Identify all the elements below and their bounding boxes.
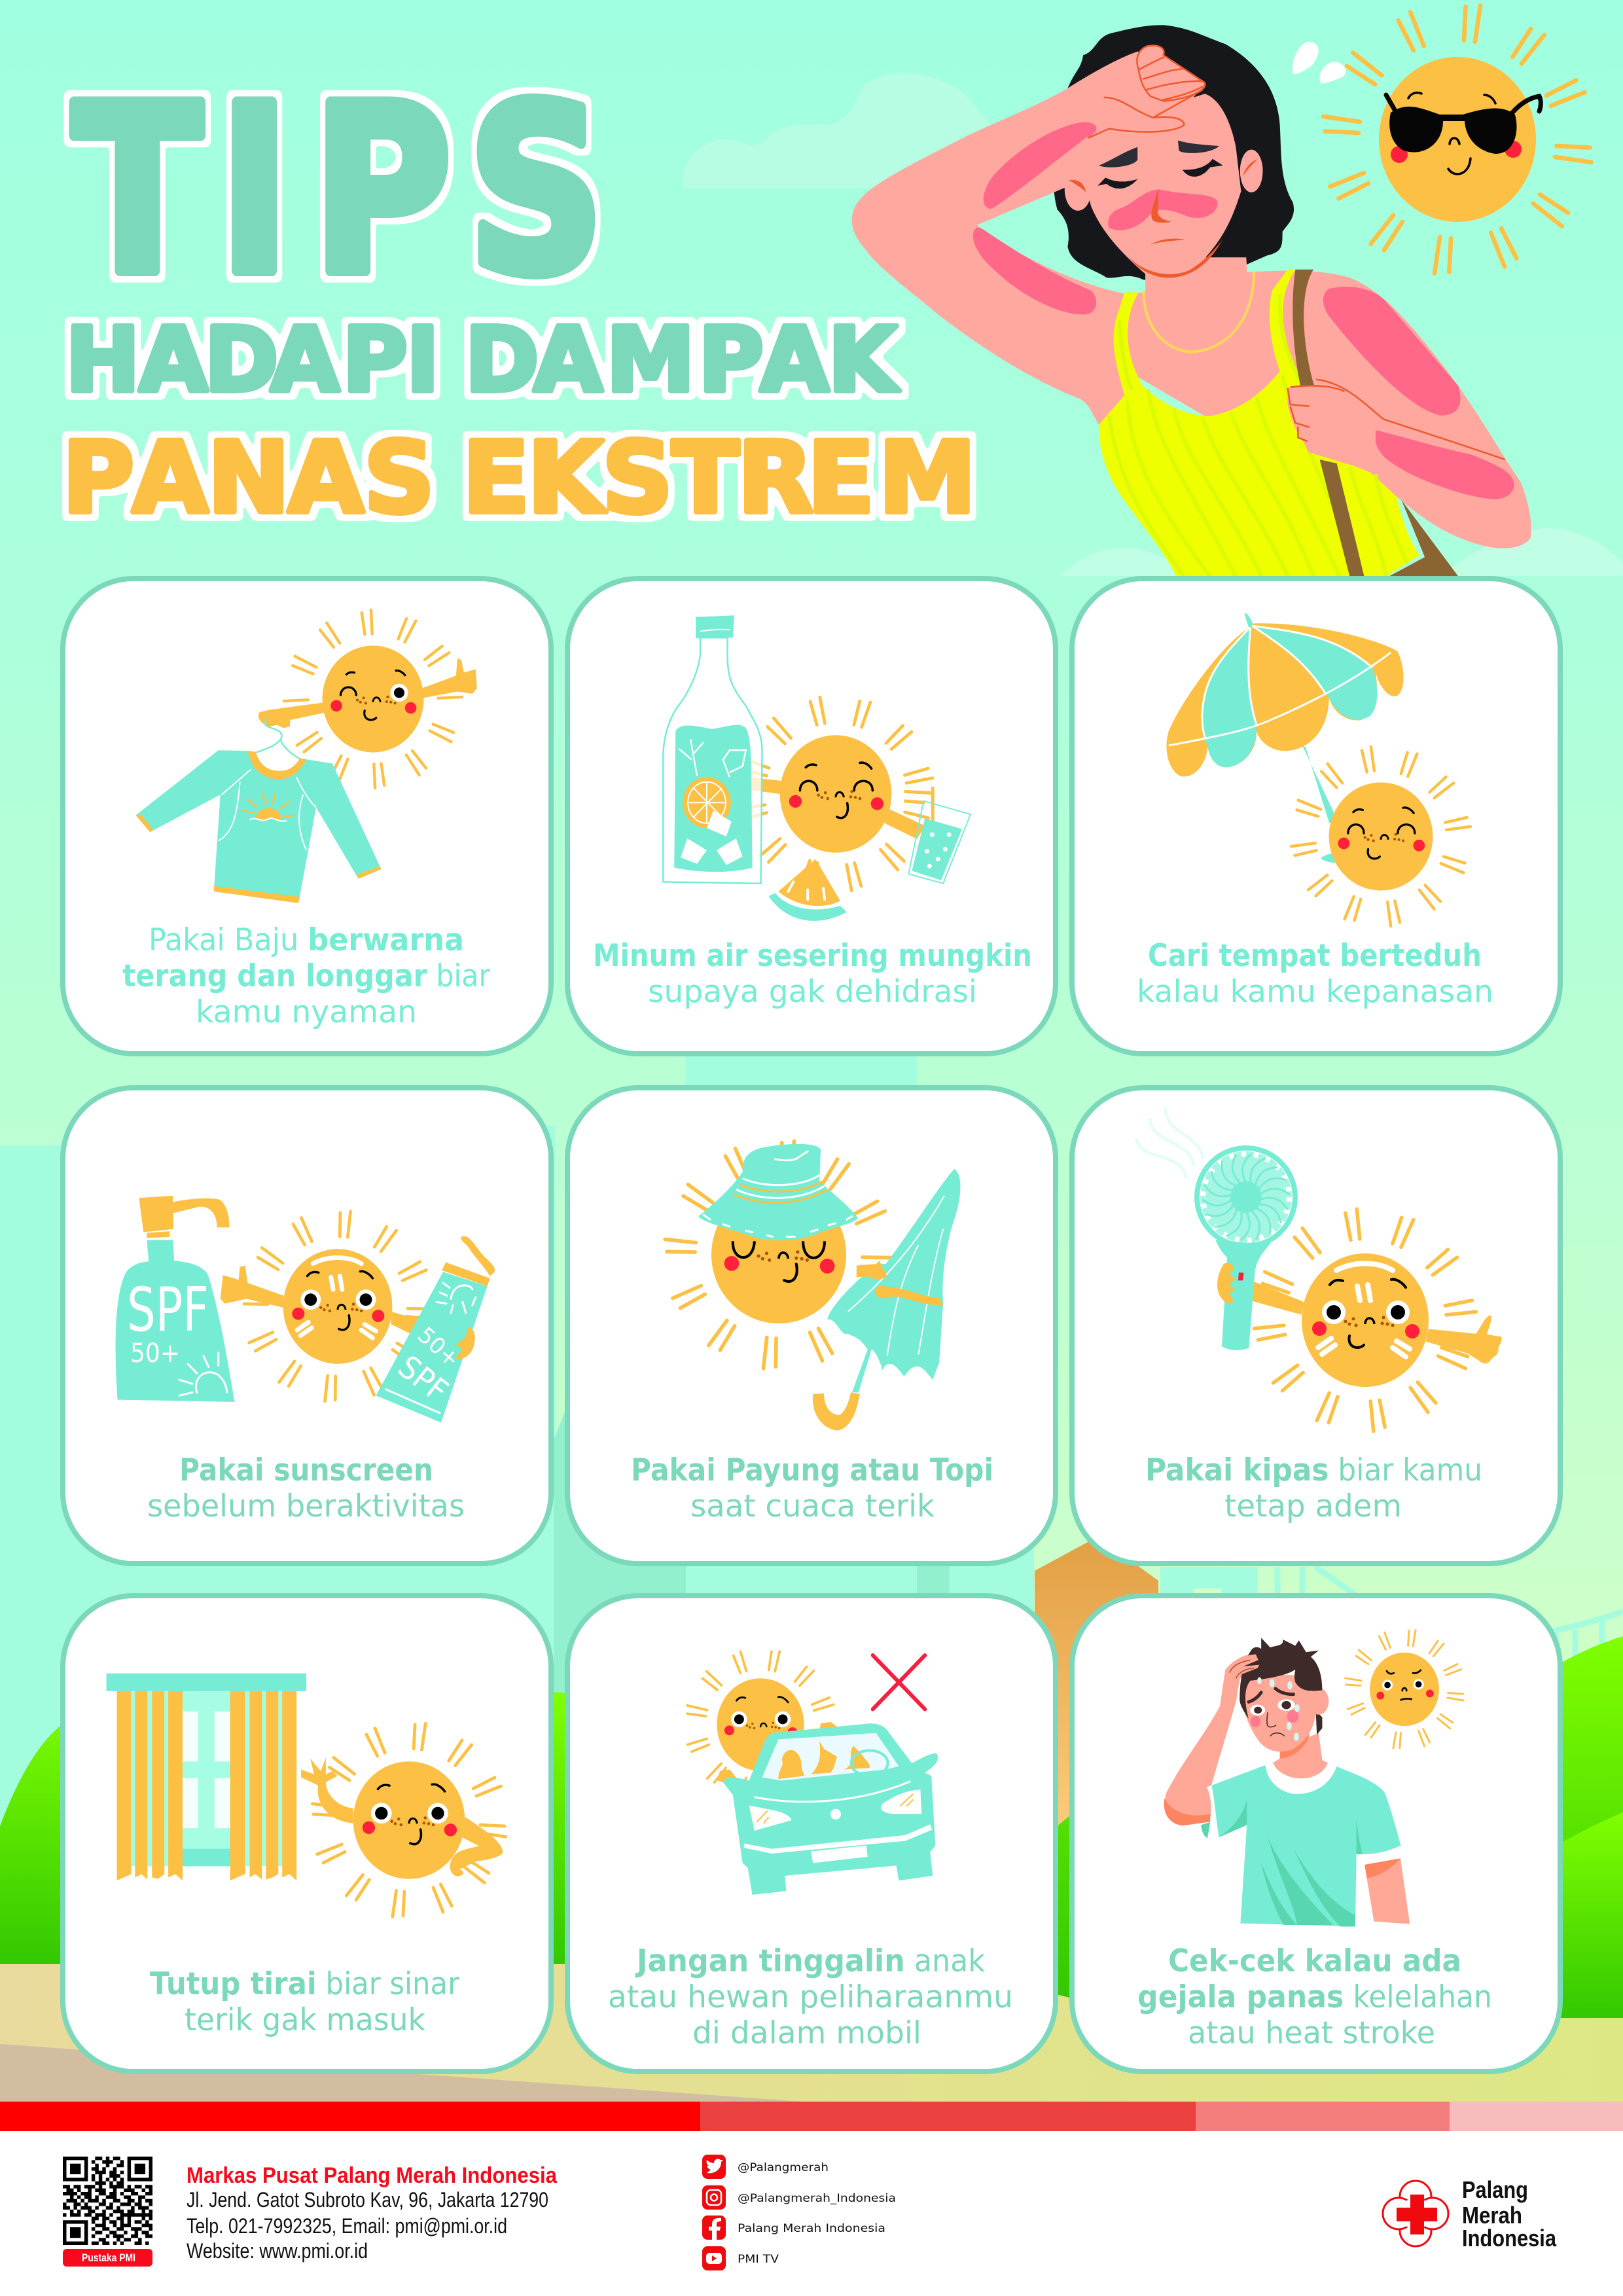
car windshield	[762, 1733, 899, 1781]
fan handle and arms	[1215, 1240, 1502, 1363]
background: right hills	[1492, 1636, 1623, 2018]
tube label: SPF: SPF	[391, 1348, 455, 1410]
man: nose and mouth	[1267, 1712, 1285, 1736]
sun body	[1379, 57, 1536, 222]
QR code	[63, 2159, 152, 2267]
footer: social links	[702, 2155, 896, 2270]
caption: card 6: tetap adem	[1224, 1488, 1402, 1524]
fan head	[1197, 1148, 1295, 1246]
car body	[723, 1723, 938, 1895]
caption: card 2: Minum air sesering mungkin	[593, 938, 1032, 974]
logo text: Palang	[1462, 2176, 1528, 2203]
background: road wedge	[0, 2044, 802, 2102]
logo cross	[1397, 2195, 1437, 2234]
background: clouds	[683, 73, 1054, 188]
logo white center	[1400, 2198, 1431, 2229]
fan illustration	[1136, 1107, 1502, 1363]
panel: card 4 sunscreen	[63, 1088, 551, 1564]
caption: card 5: saat cuaca terik	[690, 1488, 935, 1524]
caption: card 1	[122, 922, 491, 1030]
man: elbow shade	[1164, 1798, 1210, 1825]
headlight glints	[757, 1794, 913, 1823]
caption: card 5: Pakai Payung atau Topi	[631, 1452, 993, 1488]
panel: card 1 clothes	[63, 579, 551, 1054]
shirt trim	[135, 751, 381, 903]
caption: card 7: terik gak masuk	[185, 2002, 426, 2038]
background: middle-right hill	[1021, 1813, 1178, 2022]
social text: PMI TV	[738, 2253, 779, 2266]
background: buildings	[0, 1021, 1368, 1872]
icon: youtube	[702, 2246, 726, 2270]
woman: top stripes	[1109, 294, 1406, 577]
sun arms	[259, 658, 477, 728]
woman: hand contour lines	[1288, 380, 1505, 459]
ice cubes	[681, 810, 743, 865]
caption: card 7	[150, 1966, 460, 2038]
shirt	[135, 750, 381, 903]
caption: card 5	[631, 1452, 993, 1524]
social text: Palang Merah Indonesia	[738, 2222, 885, 2235]
curtains illustration	[107, 1674, 503, 1880]
shirt lines	[219, 769, 316, 850]
hat bands	[736, 1175, 824, 1198]
woman: body and right arm	[1122, 257, 1531, 548]
man: sweat drops	[1257, 1677, 1300, 1741]
tube cap	[442, 1236, 495, 1286]
title: PANAS EKSTREM: PANAS EKSTREM	[62, 422, 976, 535]
woman: raised arm	[852, 52, 1205, 425]
man: arm shade	[1364, 1858, 1400, 1878]
panel: card 2 water	[567, 579, 1056, 1054]
man: raised arm	[1165, 1655, 1259, 1825]
bottle label: 50+: 50+	[130, 1338, 180, 1369]
background: left hill	[0, 1687, 982, 1970]
tube lines	[385, 1283, 476, 1413]
man illustration	[1164, 1638, 1410, 1926]
bottle label: SPF: SPF	[127, 1275, 209, 1346]
water illustration	[663, 615, 971, 921]
footer: address: Website: www.pmi.or.id	[187, 2239, 368, 2263]
man: hand fingers	[1226, 1655, 1259, 1681]
window panes	[183, 1712, 230, 1828]
car emblem	[830, 1809, 841, 1820]
footer: address: Markas Pusat Palang Merah Indonesia	[187, 2163, 558, 2188]
sun arms	[749, 777, 925, 839]
man: face	[1242, 1675, 1316, 1751]
icon: twitter	[702, 2155, 726, 2179]
woman: yellow top	[1099, 270, 1419, 577]
panel: card 8 car	[567, 1596, 1056, 2072]
bottle water	[674, 725, 753, 872]
caption: card 1: terang dan longgar biar	[122, 958, 491, 994]
woman: face	[1085, 94, 1241, 276]
window	[130, 1691, 296, 1866]
sun: card 8	[671, 1635, 850, 1814]
caption: card 1: Pakai Baju berwarna	[149, 922, 464, 958]
caption: card 4	[147, 1452, 465, 1524]
sun arms	[221, 1266, 423, 1337]
woman: eyebrows and closed eyes	[1099, 141, 1219, 168]
tube label: 50+: 50+	[412, 1322, 465, 1373]
curtains	[117, 1691, 296, 1880]
caption: card 3	[1137, 938, 1493, 1010]
umbrella and hat illustration	[698, 1144, 960, 1431]
woman: fingers on forehead	[1137, 46, 1205, 101]
caption: card 8: atau hewan peliharaanmu	[608, 1979, 1013, 2015]
caption: card 6	[1145, 1452, 1482, 1524]
woman: finger lines	[1088, 57, 1204, 138]
panel: card 6 fan	[1072, 1088, 1560, 1564]
caption: card 9: gejala panas kelelahan	[1137, 1979, 1492, 2015]
background: railing	[1505, 1611, 1623, 1676]
sun: card 3	[1277, 733, 1484, 940]
man: eyebrows	[1249, 1689, 1294, 1702]
caption: card 4: Pakai sunscreen	[179, 1452, 433, 1488]
logo flower	[1383, 2181, 1448, 2246]
man: right arm	[1364, 1858, 1410, 1924]
caption: card 9: atau heat stroke	[1188, 2015, 1435, 2051]
shirt illustration	[135, 658, 477, 903]
woman: eyelids	[1097, 159, 1223, 188]
QR label: Pustaka PMI	[82, 2251, 135, 2264]
sun hands	[718, 1722, 837, 1784]
woman: hand on strap	[1288, 385, 1505, 473]
man: hand lines	[1230, 1660, 1254, 1678]
panel: card 3 shade	[1072, 579, 1560, 1054]
woman: bag strap	[1293, 270, 1458, 577]
woman: necklace	[1144, 272, 1254, 352]
bottle pump	[139, 1196, 230, 1238]
leaves	[679, 739, 746, 777]
sun: card 9	[1336, 1621, 1472, 1757]
caption: card 9	[1137, 1943, 1492, 2051]
woman: hair	[1050, 25, 1294, 287]
woman: sweat drops	[1293, 41, 1346, 84]
bottle cap	[696, 615, 734, 638]
car bumper	[744, 1824, 932, 1863]
man: shirt	[1211, 1763, 1401, 1926]
logo text: Merah	[1462, 2202, 1522, 2229]
hat stitches	[704, 1151, 852, 1236]
hat orange bands	[733, 1181, 827, 1202]
panel: card 5 umbrella and hat	[567, 1088, 1056, 1564]
glass and straw	[931, 787, 935, 823]
sun: card 5	[654, 1130, 903, 1379]
umbrella handle	[813, 1392, 860, 1431]
caption: card 8: Jangan tinggalin anak	[635, 1943, 986, 1979]
icon: facebook	[702, 2215, 726, 2240]
title: HADAPI DAMPAK: HADAPI DAMPAK	[65, 309, 900, 412]
caption: card 2	[593, 938, 1032, 1010]
passengers	[778, 1741, 870, 1779]
panel: card 9 symptoms	[1072, 1596, 1560, 2072]
steering wheel	[851, 1750, 888, 1776]
woman: ears	[1065, 150, 1263, 211]
sun arm waving	[301, 1758, 503, 1876]
man: shirt folds	[1201, 1800, 1363, 1926]
caption: card 3: Cari tempat berteduh	[1148, 938, 1482, 974]
closed umbrella	[827, 1169, 960, 1392]
caption: card 1: kamu nyaman	[196, 994, 417, 1030]
curtain rod	[107, 1674, 306, 1691]
title	[62, 56, 976, 535]
fan steam	[1136, 1107, 1203, 1178]
footer: address	[187, 2163, 558, 2263]
sun smile	[1408, 93, 1495, 174]
hood line	[755, 1781, 910, 1802]
man: neck shade	[1280, 1733, 1310, 1759]
caption: card 4: sebelum beraktivitas	[147, 1488, 465, 1524]
sunscreen tube	[376, 1272, 488, 1422]
man: eyes	[1250, 1699, 1295, 1715]
sunglasses	[1386, 95, 1541, 154]
background: cloud right	[1060, 528, 1623, 576]
logo: Palang Merah Indonesia	[1383, 2176, 1557, 2251]
logo text	[1462, 2176, 1557, 2251]
red cross mark	[873, 1655, 925, 1709]
caption: card 3: kalau kamu kepanasan	[1137, 974, 1493, 1010]
social text: @Palangmerah_Indonesia	[738, 2192, 896, 2205]
window sill	[183, 1849, 232, 1866]
sun hand	[857, 1261, 887, 1280]
background: house	[1035, 1537, 1160, 1833]
car headlights	[749, 1789, 921, 1831]
shirt hanger	[255, 719, 300, 759]
melon slice	[778, 859, 840, 906]
footer background	[0, 2131, 1623, 2296]
orange slice	[683, 777, 731, 828]
illustration: woman with sunburn	[852, 25, 1531, 577]
tube hand	[455, 1327, 475, 1359]
sun: card 1	[278, 604, 468, 794]
sun cheeks	[1391, 141, 1522, 163]
illustration: sun with sunglasses	[1306, 0, 1609, 291]
QR label	[63, 2249, 152, 2267]
icon: instagram	[702, 2185, 726, 2210]
title: TIPS: TIPS	[73, 56, 604, 325]
car illustration	[718, 1655, 938, 1895]
sun: card 6	[1241, 1196, 1489, 1444]
social text	[738, 2161, 896, 2266]
sun: card 4	[234, 1203, 441, 1410]
logo text: Indonesia	[1462, 2225, 1557, 2251]
footer: address: Telp. 021-7992325, Email: pmi@pmi.or.id	[187, 2214, 507, 2238]
umbrella	[1166, 613, 1404, 863]
sunscreen bottle	[116, 1240, 235, 1402]
sun: card 2	[720, 678, 952, 910]
red colour band	[0, 2102, 1623, 2131]
footer: address: Jl. Jend. Gatot Subroto Kav, 96, Jakarta 12790	[187, 2188, 548, 2212]
woman: sunburn patches	[973, 122, 1514, 499]
caption: card 8: di dalam mobil	[692, 2015, 921, 2051]
umbrella strap	[875, 1286, 943, 1305]
man: hair	[1240, 1638, 1322, 1719]
sun: card 7	[300, 1711, 518, 1929]
shirt sun logo	[243, 793, 294, 818]
woman: nose, mouth and jaw lines	[1069, 159, 1258, 278]
caption: card 8	[608, 1943, 1013, 2051]
man: ear and back hair	[1316, 1711, 1322, 1734]
man: neck	[1265, 1733, 1336, 1793]
caption: card 9: Cek-cek kalau ada	[1168, 1943, 1461, 1979]
umbrella folds	[848, 1196, 944, 1356]
caption: card 6: Pakai kipas biar kamu	[1145, 1452, 1482, 1488]
bottle	[663, 637, 762, 884]
caption: card 2: supaya gak dehidrasi	[648, 974, 977, 1010]
sunscreen illustration	[116, 1196, 495, 1422]
man: cheeks	[1251, 1710, 1298, 1727]
bottle sun sketch	[179, 1353, 227, 1395]
caption: card 7: Tutup tirai biar sinar	[150, 1966, 460, 2002]
social text: @Palangmerah	[738, 2161, 829, 2174]
background: ground	[0, 1964, 1623, 2104]
bucket hat	[698, 1144, 858, 1240]
man: collar and sleeve bands	[1207, 1761, 1402, 1865]
panel: card 7 curtains	[63, 1596, 551, 2072]
